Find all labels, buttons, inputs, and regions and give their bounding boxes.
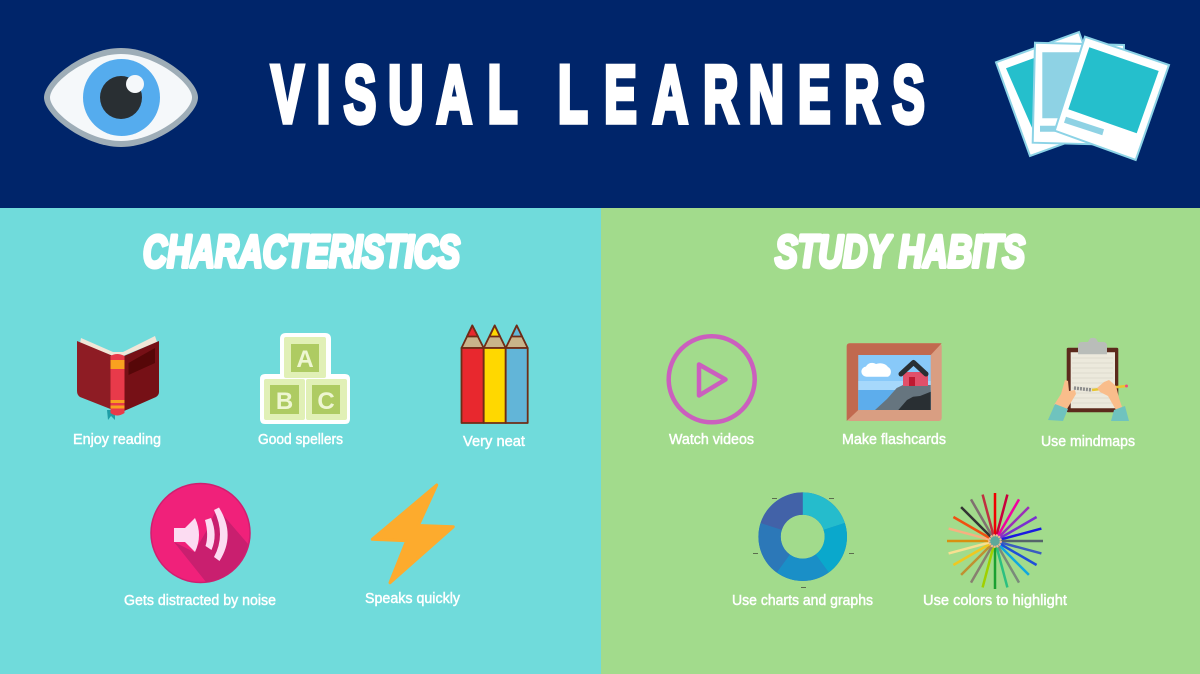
label: good spellers: Good spellers — [258, 432, 343, 448]
label: use colors to highlight: Use colors to highlight — [923, 593, 1067, 609]
icon: play button — [669, 336, 755, 422]
icon: clipboard with hands — [1048, 338, 1129, 421]
panel: characteristics — [0, 208, 601, 674]
label: make flashcards: Make flashcards — [842, 432, 946, 448]
label: enjoy reading: Enjoy reading — [73, 432, 161, 448]
panel: study habits — [601, 208, 1200, 674]
icon: book — [77, 336, 159, 420]
icon: abc blocks: C — [317, 388, 335, 415]
icon: photographs — [996, 32, 1169, 160]
label: watch videos: Watch videos — [669, 432, 754, 448]
label: use charts and graphs: Use charts and graphs — [732, 593, 873, 609]
heading: study habits: STUDY HABITS — [775, 226, 1025, 277]
icon: eye — [44, 48, 198, 147]
icon: lightning bolt — [372, 485, 453, 583]
label: gets distracted by noise: Gets distracted by noise — [124, 593, 276, 609]
icon: abc blocks: B — [276, 388, 293, 415]
label: use mindmaps: Use mindmaps — [1041, 434, 1135, 450]
title: VISUAL LEARNERS — [271, 51, 925, 140]
header band — [0, 0, 1200, 208]
label: very neat: Very neat — [463, 434, 525, 450]
icon: framed picture — [847, 343, 942, 421]
chart: donut — [753, 492, 854, 588]
icon: radial colored pencils — [947, 493, 1043, 589]
icon: abc blocks — [260, 333, 350, 424]
icon: speaker — [151, 484, 250, 582]
icon: pencils — [462, 326, 528, 423]
label: speaks quickly: Speaks quickly — [365, 591, 461, 607]
heading: characteristics: CHARACTERISTICS — [143, 226, 460, 277]
icon: abc blocks: A — [296, 346, 314, 373]
